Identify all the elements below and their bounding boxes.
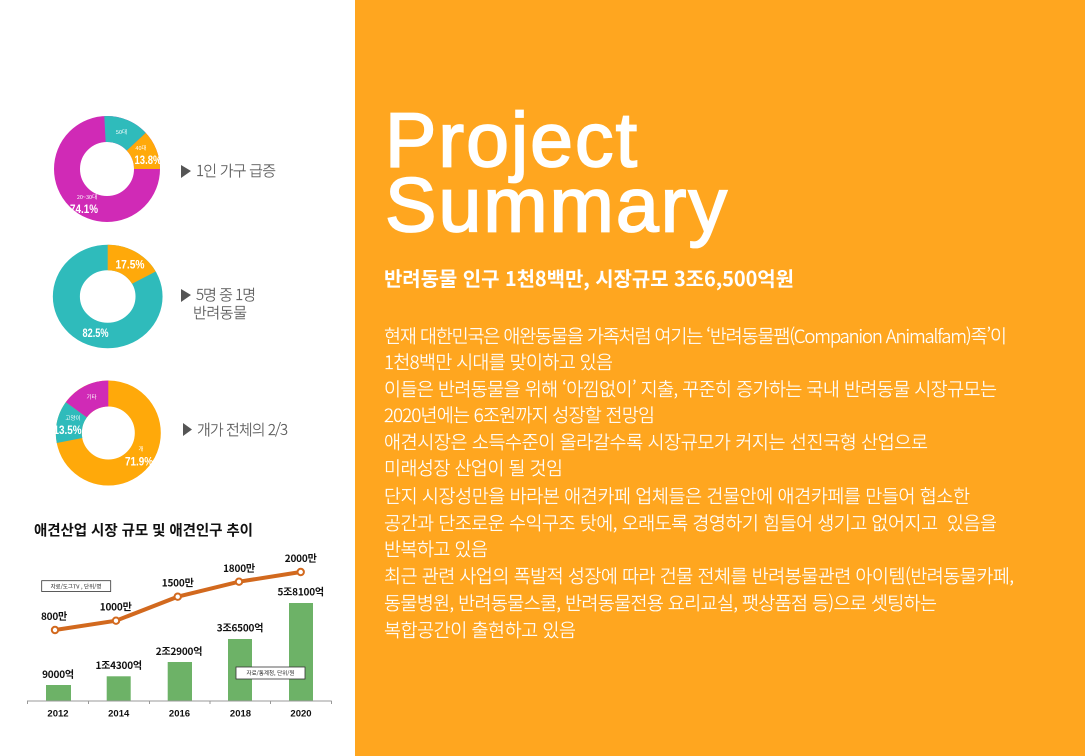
title: Project [385, 98, 637, 184]
year labels: 2020 [290, 708, 312, 720]
subtitle: 반려동물 인구 1천8백만, 시장규모 3조6,500억원 [384, 263, 794, 292]
bars: market size [46, 603, 313, 701]
body text: 현재 대한민국은 애완동물을 가족처럼 여기는 ‘반려동물팸(Companion Animalfam)족’이 [384, 323, 1007, 349]
donut chart: single-person households: 40대 [135, 144, 147, 152]
donut chart: pet ownership: 17.5% [116, 258, 145, 272]
donut chart: dog share [54, 393, 153, 472]
body text: 최근 관련 사업의 폭발적 성장에 따라 건물 전체를 반려봉물관련 아이템(반려동물카페, [384, 563, 1014, 589]
year labels: 2018 [230, 708, 251, 720]
label: single-person households: 1인 가구 급증 [196, 160, 276, 181]
year labels: 2012 [47, 708, 69, 720]
donut chart: dog share: 개 [138, 445, 144, 453]
donut chart: single-person households: 74.1% [70, 202, 98, 216]
body text: 단지 시장성만을 바라본 애견카페 업체들은 건물안에 애견카페를 만들어 협소한 [384, 483, 970, 509]
year labels: 2014 [108, 708, 130, 720]
title: Summary [385, 162, 728, 248]
source box: population: 자료/도그TV , 단위/명 [51, 582, 101, 590]
axis [27, 701, 332, 704]
donut chart: single-person households [67, 128, 162, 216]
line labels: 1500만 [162, 574, 194, 590]
source box: market: 자료/통계청, 단위/원 [247, 669, 294, 677]
line: pet population [52, 569, 304, 633]
body text: 미래성장 산업이 될 것임 [384, 455, 563, 481]
line labels: 1800만 [223, 560, 255, 575]
source box: market [236, 667, 305, 679]
body text: 1천8백만 시대를 맞이하고 있음 [384, 349, 613, 375]
donut chart: pet ownership: 82.5% [82, 326, 109, 340]
source box: population [42, 581, 111, 592]
donut chart: dog share: 기타 [86, 393, 97, 401]
bar labels: 9000억 [42, 666, 74, 681]
bar labels: 5조8100억 [277, 584, 324, 598]
label: dog share: 개가 전체의 2/3 [197, 419, 288, 440]
donut chart: dog share: 71.9% [125, 454, 153, 468]
donut chart: single-person households: 13.8% [134, 153, 162, 167]
body text: 공간과 단조로운 수익구조 탓에, 오래도록 경영하기 힘들어 생기고 없어지고 있음을 [384, 510, 997, 536]
body text: 애견시장은 소득수준이 올라갈수록 시장규모가 커지는 선진국형 산업으로 [384, 429, 928, 455]
line labels: 1000만 [100, 598, 132, 614]
line labels: 2000만 [285, 550, 317, 565]
donut chart: dog share: 고양이 [65, 414, 81, 422]
line labels: 800만 [41, 608, 67, 623]
panel: orange summary [355, 0, 1085, 756]
donut chart: pet ownership [66, 258, 149, 340]
label: pet ownership: 5명 중 1명 [196, 284, 256, 305]
title [385, 98, 728, 248]
body text: 이들은 반려동물을 위해 ‘아낌없이’ 지출, 꾸준히 증가하는 국내 반려동물 시장규모는 [384, 376, 997, 402]
chart: market size and pet population [27, 550, 332, 720]
chart heading: 애견산업 시장 규모 및 애견인구 추이 [34, 520, 253, 540]
bar labels [42, 584, 324, 681]
bar labels: 3조6500억 [217, 620, 263, 634]
bar labels: 2조2900억 [156, 643, 202, 658]
label: pet ownership [181, 284, 256, 323]
label: pet ownership: 반려동물 [193, 302, 247, 323]
body text: 복합공간이 출현하고 있음 [384, 617, 576, 643]
body text: 동물병원, 반려동물스쿨, 반려동물전용 요리교실, 팻상품점 등)으로 셋팅하는 [384, 590, 937, 616]
body text: 2020년에는 6조원까지 성장할 전망임 [384, 402, 655, 428]
year labels: 2016 [169, 708, 190, 720]
bar labels: 1조4300억 [95, 657, 142, 672]
donut chart: single-person households: 20~30대 [77, 193, 97, 201]
body text: 반복하고 있음 [384, 536, 488, 562]
body text [384, 323, 1014, 643]
donut chart: dog share: 13.5% [54, 423, 82, 437]
donut chart: single-person households: 50대 [116, 128, 127, 136]
year labels [47, 708, 312, 720]
line labels [41, 550, 317, 623]
